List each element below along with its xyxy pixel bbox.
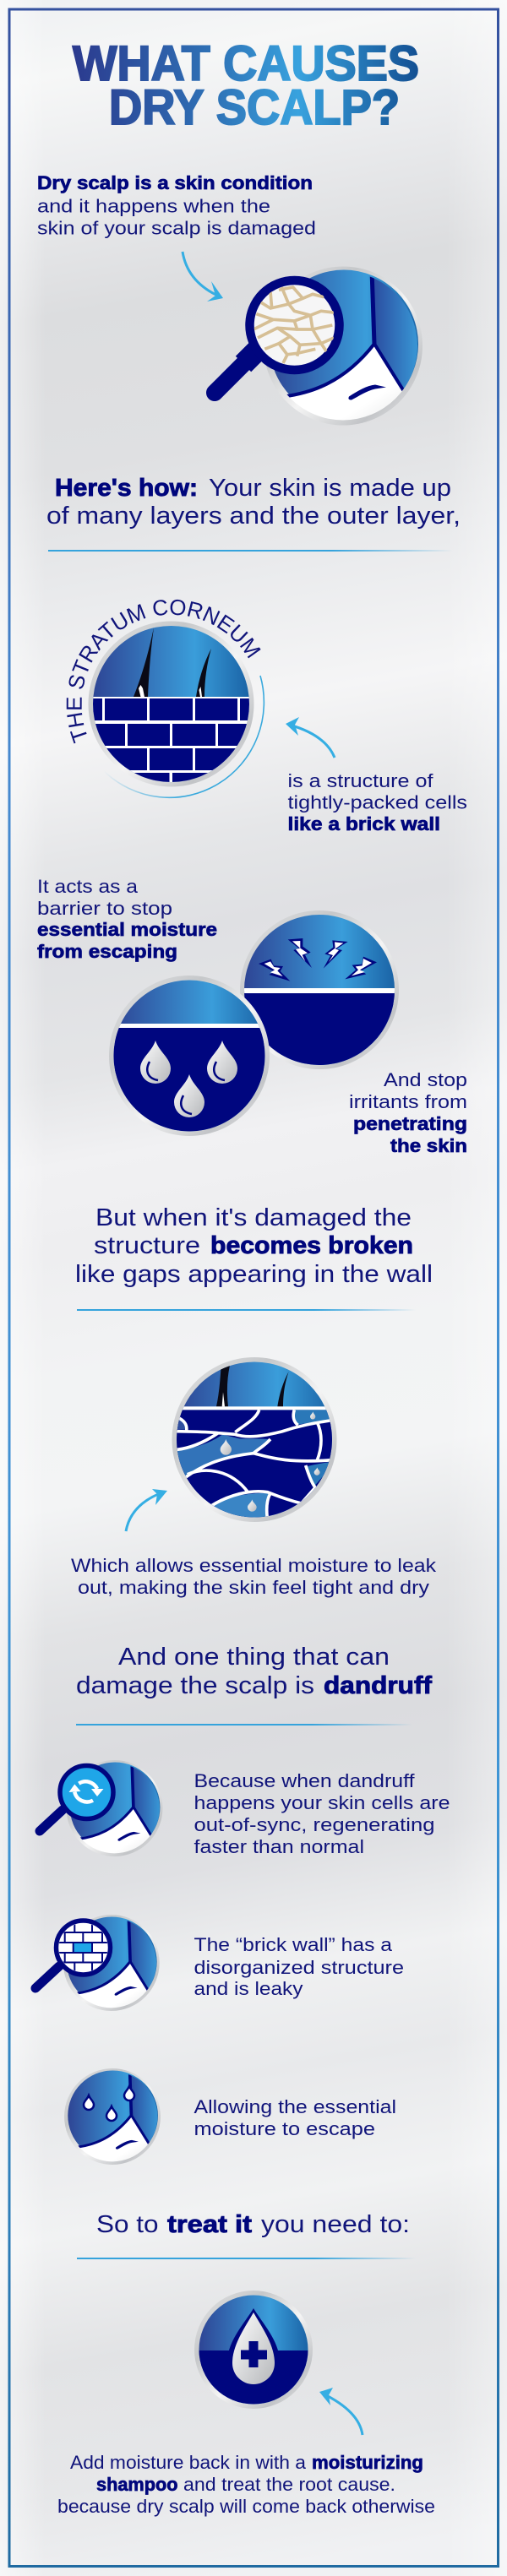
heading: dandruff: And one thing that can [118, 1644, 390, 1671]
curved label: THE STRATUM CORNEUM [66, 600, 261, 743]
icon: stratum corneum brick wall [66, 600, 265, 799]
arrow: to cracked circle [126, 1489, 167, 1531]
heading: treat it [96, 2211, 410, 2238]
arrow: to brick wall [286, 717, 335, 758]
thin blue arc [104, 676, 264, 797]
heading: treat it: you need to: [261, 2211, 410, 2238]
text: brick wall: tightly-packed cells [287, 792, 467, 812]
text: leak [71, 1555, 437, 1598]
text: brick wall [287, 770, 467, 834]
white cracks [175, 1410, 335, 1520]
text: out of sync: happens your skin cells are [194, 1792, 450, 1813]
icon: head with refresh magnifier [40, 1760, 163, 1860]
text: brick wall: like a brick wall [287, 813, 440, 834]
text: irritants: penetrating [353, 1113, 467, 1134]
icon: moisture plus drop [194, 2291, 313, 2410]
heading: becomes broken [75, 1204, 433, 1288]
heading: becomes broken: becomes broken [210, 1232, 413, 1259]
text: treatment: moisturizing [312, 2452, 423, 2473]
text: barrier: barrier to stop [37, 898, 172, 919]
text: treatment: shampoo [96, 2474, 177, 2495]
heading: becomes broken: like gaps appearing in the wall [75, 1261, 433, 1288]
arrow: to treatment [319, 2388, 363, 2435]
text: moisture escape: moisture to escape [194, 2118, 375, 2139]
icon: head with magnifier and cracked skin [215, 267, 423, 431]
text: moisture escape [194, 2096, 396, 2139]
intro text: and it happens when the [37, 196, 270, 216]
text: barrier [37, 876, 217, 962]
icon: head with moisture drops [64, 2068, 161, 2168]
text: leak: out, making the skin feel tight and dry [78, 1577, 429, 1598]
heading: treat it: So to [96, 2211, 159, 2238]
heading: dandruff: dandruff [324, 1672, 432, 1699]
text: irritants: And stop [384, 1069, 467, 1090]
text: here's how: Here's how: [55, 475, 198, 502]
icon: cracked barrier circle [172, 1357, 336, 1523]
text: barrier: from escaping [37, 941, 177, 962]
title: DRY SCALP? [109, 80, 400, 135]
text: moisture escape: Allowing the essential [194, 2096, 396, 2117]
intro text: Dry scalp is a skin condition [37, 172, 313, 193]
text: barrier: essential moisture [37, 919, 217, 940]
text: here's how: of many layers and the outer layer, [46, 503, 461, 530]
text: brick wall: is a structure of [287, 770, 434, 791]
head circle [264, 267, 423, 431]
heading: treat it: treat it [167, 2211, 252, 2238]
bolts [259, 938, 377, 981]
heading: becomes broken: structure [94, 1232, 200, 1259]
small drops [221, 1411, 320, 1512]
text: out of sync: Because when dandruff [194, 1770, 416, 1791]
text: irritants [349, 1069, 467, 1156]
text: treatment: because dry scalp will come back otherwise [57, 2496, 435, 2517]
text: here's how: Your skin is made up [209, 475, 451, 502]
heading: dandruff [76, 1644, 432, 1699]
heading: dandruff: damage the scalp is [76, 1672, 314, 1699]
text: treatment: Add moisture back in with a [70, 2452, 307, 2473]
magnifying glass [215, 280, 340, 393]
brick lines in lens [59, 1924, 108, 1971]
drops [140, 1041, 237, 1117]
title: WHAT CAUSES [73, 36, 419, 91]
text: barrier: It acts as a [37, 876, 139, 897]
exposed gaps [175, 1434, 270, 1476]
text: out of sync: out-of-sync, regenerating [194, 1814, 434, 1835]
text: irritants: the skin [390, 1135, 467, 1156]
text: out of sync [194, 1770, 450, 1857]
intro text: skin of your scalp is damaged [37, 218, 316, 238]
text: treatment [57, 2452, 435, 2517]
text: here's how [46, 475, 461, 530]
text: irritants: irritants from [349, 1091, 467, 1112]
intro text [37, 172, 316, 238]
text: leak: Which allows essential moisture to leak [71, 1555, 437, 1576]
icon: head with brick magnifier [35, 1915, 160, 2014]
icon: irritants circle with bolts [240, 910, 401, 1069]
text: brick wall leaky [194, 1934, 404, 1999]
plus sign [241, 2341, 267, 2367]
refresh arrows [69, 1781, 103, 1802]
escaping drops [84, 2086, 134, 2121]
icon: moisture circle with drops [109, 976, 270, 1138]
hairs [216, 1366, 230, 1406]
heading: becomes broken: But when it's damaged the [95, 1204, 412, 1231]
text: treatment: and treat the root cause. [183, 2474, 395, 2495]
text: brick wall leaky: and is leaky [194, 1978, 303, 1999]
text: out of sync: faster than normal [194, 1836, 364, 1857]
title [73, 36, 419, 135]
text: brick wall leaky: The “brick wall” has a [194, 1934, 393, 1955]
text: brick wall leaky: disorganized structure [194, 1957, 404, 1978]
arrow: intro to head [183, 252, 223, 302]
